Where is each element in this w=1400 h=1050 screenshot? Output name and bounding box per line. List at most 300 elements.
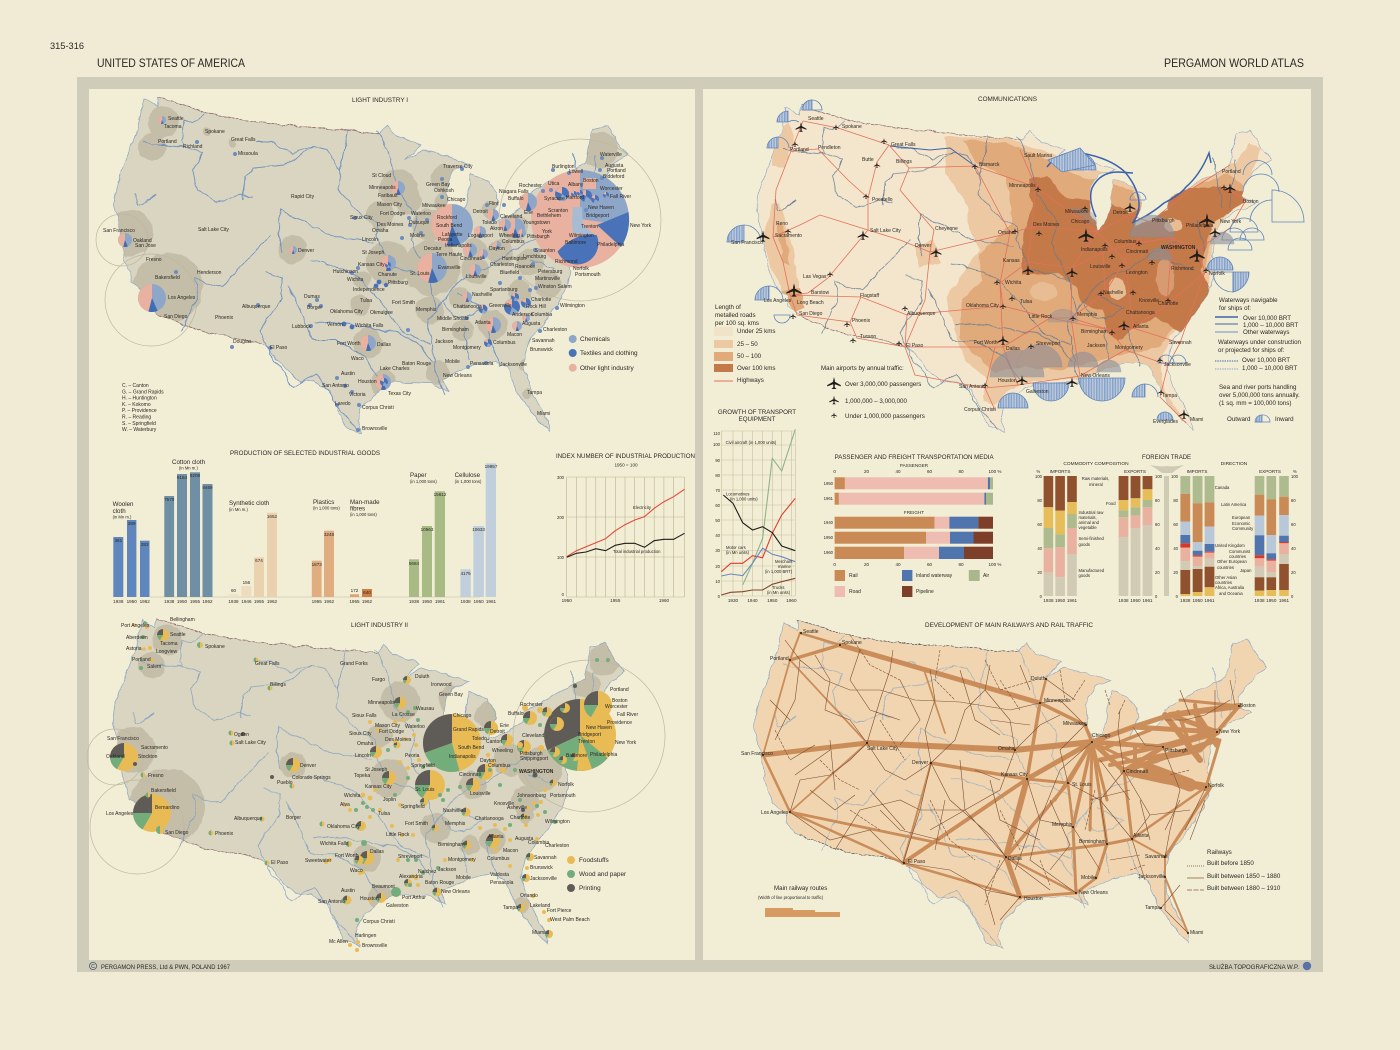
city labels: Lafayette (442, 232, 463, 238)
city labels: Fort Worth (337, 341, 361, 347)
city labels: Savannah (1169, 340, 1192, 346)
bar value labels: 5684 (409, 561, 420, 566)
labels and axes: 60 (1291, 522, 1296, 527)
axis and series labels: 40 (715, 533, 721, 538)
axis and line labels: Electricity (633, 505, 652, 510)
axis and series labels: (in Mn units) (726, 550, 750, 555)
city labels: Phoenix (852, 318, 871, 324)
city labels: Oakland (133, 238, 152, 244)
city labels: Portsmouth (550, 793, 576, 799)
city labels: New Haven (588, 205, 614, 211)
city labels: Providence (607, 720, 632, 726)
bars: plastics (312, 531, 334, 597)
city labels: Oakland (106, 754, 125, 760)
bars: woolen cloth (113, 520, 150, 597)
legend: Pipeline (916, 589, 934, 595)
city labels: Baton Rouge (425, 880, 454, 886)
bar value labels: 389 (128, 521, 136, 526)
city labels: Aberdeen (126, 635, 148, 641)
product labels: fibres (350, 506, 365, 512)
chart title: FOREIGN TRADE (1142, 454, 1192, 461)
product labels: Woolen (113, 501, 134, 508)
product labels: Plastics (313, 499, 334, 506)
bar value labels: 19957 (485, 464, 498, 469)
labels and axes: 1961 (1067, 598, 1078, 603)
city labels: Portland (607, 168, 626, 174)
bar value labels: 3248 (324, 532, 335, 537)
labels and axes: Other European (1217, 559, 1247, 564)
bar year labels: 1950 (422, 599, 433, 604)
labels and axes: 100 (1171, 474, 1179, 479)
legend: light industry II (567, 856, 627, 892)
city labels: Chattanooga (1126, 310, 1155, 316)
city labels: Utica (548, 181, 560, 187)
left page panel (89, 89, 695, 960)
city labels: Baton Rouge (402, 361, 431, 367)
city labels: Sacramento (141, 745, 168, 751)
legend: Inland waterway (916, 573, 953, 579)
city labels: Cleveland (500, 214, 522, 220)
title: LIGHT INDUSTRY II (351, 622, 408, 629)
city labels: Lincoln (362, 237, 378, 243)
labels and axes: Manufactured (1078, 568, 1105, 573)
line: trucks (721, 578, 795, 595)
city labels: Texas City (388, 391, 412, 397)
city labels: New York (615, 740, 637, 746)
city labels: Atlanta (488, 834, 504, 840)
city labels: San Jose (135, 243, 156, 249)
rivers (135, 114, 596, 430)
city labels: Roanoke (515, 264, 535, 270)
city labels: Harlingen (355, 933, 377, 939)
city labels: Chattanooga (453, 304, 482, 310)
city labels: Toledo (482, 220, 497, 226)
legend: waterways and ports: Waterways under construction (1218, 339, 1302, 346)
city labels: Charleston (543, 327, 567, 333)
axis and series labels: 20 (715, 564, 721, 569)
city labels: Montgomery (448, 857, 476, 863)
city labels: Columbus (502, 239, 525, 245)
labels and axes: 1938 (1180, 598, 1191, 603)
city labels: Louisville (470, 791, 491, 797)
labels and axes: Industrial raw (1078, 510, 1104, 515)
line: total industrial production (567, 533, 684, 557)
footer: survey credit: SŁUŻBA TOPOGRAFICZNA W.P. (1209, 964, 1299, 971)
bar value labels: 10633 (472, 527, 485, 532)
city labels: Buffalo (508, 196, 524, 202)
city labels: Spokane (205, 129, 225, 135)
legend: metalled roads: per 100 sq. kms (715, 320, 759, 327)
bar year labels: 1938 (409, 599, 420, 604)
thin range circles (87, 660, 665, 874)
freight bars (835, 517, 993, 559)
axis and line labels: 1955 (610, 598, 621, 603)
axis and row labels: PASSENGER (900, 463, 929, 468)
city labels: Wichita (347, 277, 364, 283)
city labels: Great Falls (891, 142, 916, 148)
city labels: Shreveport (1036, 341, 1061, 347)
city labels: Spartanburg (490, 287, 518, 293)
city labels: Corpus Christi (362, 405, 394, 411)
city labels: Brownsville (362, 943, 388, 949)
bar year labels: 1950 (127, 599, 137, 604)
legend: metalled roads: Over 100 kms (737, 365, 776, 372)
city labels: Canton (486, 739, 502, 745)
city labels: Sweetwater (305, 858, 331, 864)
city labels: Philadelphia (1186, 223, 1213, 229)
city labels: Mobile (1081, 875, 1096, 881)
city labels: Beaumont (372, 884, 395, 890)
city labels: Montgomery (453, 345, 481, 351)
city labels: Atlanta (1133, 833, 1149, 839)
city labels: Mobile (445, 359, 460, 365)
city labels: Detroit (490, 729, 505, 735)
city labels: San Francisco (741, 751, 773, 757)
labels and axes: Semi-finished (1078, 536, 1105, 541)
city labels: Louisville (1090, 264, 1111, 270)
city labels: Las Vegas (803, 274, 827, 280)
city labels: Fort Worth (335, 853, 359, 859)
city labels: Portland (770, 656, 789, 662)
city labels: Boston (1243, 199, 1259, 205)
city labels: Baltimore (565, 240, 586, 246)
footer: copyright: C (91, 964, 95, 970)
axis and series labels: (in Mn units) (767, 590, 791, 595)
axis and series labels: Locomotives (726, 492, 750, 496)
city labels: Portland (610, 687, 629, 693)
city labels: WASHINGTON (519, 769, 554, 775)
axis and series labels: 1940 (747, 598, 758, 603)
city labels: Louisville (466, 274, 487, 280)
bar value labels: 674 (255, 558, 263, 563)
labels and axes: 1961 (1204, 598, 1215, 603)
labels and axes: Other Asian (1215, 575, 1238, 580)
labels and axes: Community (1232, 526, 1254, 531)
city labels: Tulsa (1020, 299, 1032, 305)
labels and axes: 80 (1291, 498, 1296, 503)
axis and row labels: 100 % (988, 562, 1002, 567)
city labels: Akron (490, 226, 503, 232)
city labels: Lexington (1126, 270, 1148, 276)
city labels: Dallas (377, 342, 391, 348)
product labels: (in Mn m.) (179, 466, 198, 470)
city labels: Douglas (233, 339, 252, 345)
city labels: Seattle (168, 116, 184, 122)
footer: copyright: PERGAMON PRESS, Ltd & PWN, POLAND 1967 (101, 964, 230, 971)
thin range circles (96, 139, 661, 346)
city labels: Richmond (555, 259, 578, 265)
labels and axes: DIRECTION (1221, 461, 1248, 467)
city labels: Wilmington (569, 233, 594, 239)
city labels: Charlotte (531, 297, 552, 303)
labels and axes: 0 (1291, 594, 1294, 599)
labels and axes: 40 (1155, 546, 1160, 551)
bar year labels: 1961 (486, 599, 497, 604)
city labels: Rockford (437, 215, 457, 221)
city labels: Corpus Christi (964, 407, 996, 413)
city labels: Vernon (327, 322, 343, 328)
key to city initials: P. – Providence (122, 408, 157, 414)
legend: waterways and ports: over 5,000,000 tons annually. (1219, 392, 1300, 399)
labels and axes: Economic (1232, 521, 1250, 526)
city labels: Billings (896, 159, 912, 165)
city labels: Fall River (617, 712, 638, 718)
city labels: Lowell (569, 169, 583, 175)
city labels: Biddeford (603, 174, 625, 180)
city labels: Nashville (1103, 290, 1124, 296)
city labels: Brownsville (362, 426, 388, 432)
city labels: Green Bay (439, 692, 463, 698)
city labels: Fort Pierce (547, 908, 572, 914)
city labels: Huntington (502, 256, 526, 262)
city labels: Pittsburgh (1152, 218, 1175, 224)
pie: New York region (531, 170, 629, 268)
labels and axes: Latin America (1221, 502, 1247, 507)
city labels: Greenville (489, 303, 512, 309)
city labels: Boston (583, 178, 599, 184)
legend: waterways and ports: Outward (1227, 416, 1251, 423)
labels and axes: 1950 (1266, 598, 1277, 603)
city labels (741, 629, 1256, 936)
pies: city industry (118, 116, 537, 390)
city labels: San Antonio (959, 384, 986, 390)
legend: light industry I: Chemicals (580, 336, 610, 343)
axis and series labels: Trucks (772, 585, 784, 590)
legend: main railway routes: Main railway routes (774, 885, 827, 892)
direction: exports (1260, 476, 1284, 596)
city labels: St Joseph (362, 250, 384, 256)
port symbols: half-circles (727, 100, 1304, 420)
chart: foreign trade (1035, 454, 1299, 603)
axis and line labels: 200 (557, 515, 565, 520)
city labels: Detroit (1113, 210, 1128, 216)
city labels: Topeka (354, 773, 370, 779)
city labels: Columbus (488, 763, 511, 769)
city labels: Cincinnati (460, 256, 482, 262)
labels and axes: 40 (1173, 546, 1179, 551)
atlas frame band (77, 77, 1323, 972)
bar year labels: 1938 (164, 599, 175, 604)
labels and axes: 1961 (1279, 598, 1290, 603)
city labels: South Bend (436, 223, 462, 229)
legend: metalled roads: 50 – 100 (737, 353, 762, 360)
product labels: (in Mn m.) (229, 507, 248, 512)
city labels: WASHINGTON (1161, 245, 1196, 251)
city labels: Denver (298, 248, 314, 254)
rivers (133, 632, 594, 943)
city labels: Atlanta (475, 320, 491, 326)
city labels: Fort Dodge (380, 211, 405, 217)
city labels: Memphis (1052, 822, 1073, 828)
city labels: San Antonio (322, 383, 349, 389)
bar year labels: 1938 (228, 599, 239, 604)
labels and axes: 40 (1037, 546, 1043, 551)
city labels: St. Louis (410, 271, 430, 277)
axis and series labels: 30 (715, 548, 721, 553)
city labels: Lake Charles (380, 366, 410, 372)
city labels: Faribault (378, 193, 398, 199)
city labels: Charleston (490, 262, 514, 268)
city labels: Chicago (447, 197, 466, 203)
labels and axes: animal and (1078, 520, 1100, 525)
city labels: Miami (532, 930, 545, 936)
axis and row labels: 0 (833, 469, 836, 474)
legend: metalled roads: Length of (715, 304, 741, 311)
city labels: San Francisco (731, 240, 763, 246)
city labels: Houston (1024, 896, 1043, 902)
city labels: Terre Haute (436, 252, 462, 258)
city labels: Cheyenne (935, 226, 958, 232)
chart title second line: EQUIPMENT (739, 416, 776, 423)
city labels: Des Moines (377, 222, 404, 228)
city labels: Sioux City (350, 215, 373, 221)
city labels: New York (1219, 729, 1241, 735)
city labels: Chicago (1092, 733, 1111, 739)
city labels: Spokane (842, 124, 862, 130)
city labels: Minneapolis (1009, 183, 1036, 189)
city labels: Flagstaff (860, 293, 880, 299)
city labels: Oklahoma City (966, 303, 999, 309)
city labels: San Diego (165, 830, 189, 836)
city labels: Dayton (480, 758, 496, 764)
header: left title: UNITED STATES OF AMERICA (97, 58, 245, 70)
legend: airports (821, 365, 925, 420)
legend (835, 570, 989, 597)
city labels: Wilmington (545, 819, 570, 825)
bars: cellulose (460, 463, 496, 597)
zone: 50 to 100 km (776, 140, 1246, 373)
center axis band (1164, 476, 1169, 596)
labels and axes: Canada (1215, 485, 1230, 490)
labels and axes: IMPORTS (1187, 469, 1207, 474)
city labels: Portland (132, 657, 151, 663)
axis and row labels: 20 (864, 469, 869, 474)
legend: light industry II: Printing (579, 885, 601, 892)
city labels: Henderson (197, 270, 222, 276)
line: motor cars (721, 498, 795, 572)
legend: airports: Over 3,000,000 passengers (845, 381, 921, 388)
axis and series labels: 80 (715, 473, 721, 478)
legend: light industry II: Foodstuffs (579, 857, 609, 864)
large pies (110, 691, 616, 832)
city labels: Duluth (1031, 676, 1046, 682)
city labels: New Orleans (443, 373, 472, 379)
city labels: Waterloo (405, 724, 425, 730)
axis and row labels: 80 (958, 469, 964, 474)
city labels: Mobile (456, 875, 471, 881)
city labels: Shreveport (398, 854, 423, 860)
city labels: Indianapolis (449, 754, 476, 760)
bars: paper (409, 491, 445, 597)
city labels: Pittsburgh (1165, 748, 1188, 754)
legend: metalled roads: metalled roads (715, 312, 756, 319)
zone: 25 to 50 km (763, 123, 1261, 423)
city labels: San Francisco (107, 736, 139, 742)
city labels: Albuquerque (907, 311, 936, 317)
city labels: Lakeland (530, 903, 551, 909)
city labels: Norfolk (573, 266, 589, 272)
axis and line labels (557, 475, 670, 603)
city labels: Portland (790, 147, 809, 153)
city labels: Macon (507, 332, 522, 338)
labels and axes: 100 (1035, 474, 1043, 479)
city labels: Buffalo (508, 711, 524, 717)
city labels: York (542, 229, 552, 235)
city labels: Dallas (1008, 856, 1022, 862)
city labels: Albuquerque (242, 304, 271, 310)
labels and axes: 60 (1037, 522, 1043, 527)
rivers (775, 119, 1236, 430)
city labels: Worcester (600, 186, 623, 192)
city labels: Joplin (383, 797, 396, 803)
city labels: Knoxville (494, 801, 514, 807)
city labels: Portland (158, 139, 177, 145)
city labels: Valdosta (490, 872, 509, 878)
city labels: Waterville (600, 152, 622, 158)
city labels: Fort Smith (405, 821, 428, 827)
labels and axes: 20 (1173, 570, 1179, 575)
bar value labels: 156 (243, 580, 251, 585)
city labels: San Francisco (103, 228, 135, 234)
city labels: Pueblo (277, 780, 293, 786)
city labels: Asheville (507, 805, 527, 811)
legend: railways: Built between 1880 – 1910 (1207, 885, 1281, 892)
city labels: Norfolk (558, 782, 574, 788)
city labels: Fort Dodge (379, 729, 404, 735)
axis and series labels: 1950 (767, 598, 778, 603)
city labels: St Cloud (372, 173, 391, 179)
city labels: Long Beach (797, 300, 824, 306)
city labels: Columbus (493, 340, 516, 346)
axis and series labels: Merchant (775, 559, 793, 564)
city labels: Galveston (1026, 389, 1049, 395)
labels and axes: Communist (1229, 549, 1251, 554)
labels and axes: 60 (1155, 522, 1160, 527)
axis and series labels: 60 (715, 503, 721, 508)
city labels: Tulsa (360, 298, 372, 304)
key to city initials: H. – Huntington (122, 396, 157, 402)
city labels: Houston (998, 378, 1017, 384)
city labels: Bridgeport (578, 732, 602, 738)
labels and axes: 0 (1155, 594, 1158, 599)
bar value labels: 1873 (312, 562, 322, 567)
city labels: New Orleans (441, 889, 470, 895)
city labels: Ogden (234, 732, 249, 738)
axis and row labels: 1960 (824, 550, 834, 555)
city labels: Denver (915, 243, 931, 249)
city labels: Bakersfield (151, 788, 176, 794)
city labels: Port Angeles (121, 623, 150, 629)
city labels: Los Angeles (764, 298, 792, 304)
city labels: Tampa (1162, 393, 1177, 399)
city labels: Pensacola (470, 361, 494, 367)
bar year labels: 1962 (324, 599, 335, 604)
city labels: Fresno (146, 257, 162, 263)
city labels: Little Rock (386, 832, 410, 838)
key to city initials: G. – Grand Rapids (122, 389, 164, 395)
legend: light industry I: Other light industry (580, 365, 634, 372)
city labels: Miami (537, 411, 550, 417)
axis and line labels: 1950 (562, 598, 572, 603)
bar value labels: 172 (351, 588, 359, 593)
bar year labels: 1938 (113, 599, 124, 604)
city labels: Columbia (531, 312, 552, 318)
city labels: Fort Worth (974, 340, 998, 346)
bar value labels: 8469 (202, 485, 213, 490)
city labels: Chattanooga (475, 816, 504, 822)
city labels: Hartford (566, 195, 584, 201)
city labels: Johnsonburg (517, 793, 546, 799)
